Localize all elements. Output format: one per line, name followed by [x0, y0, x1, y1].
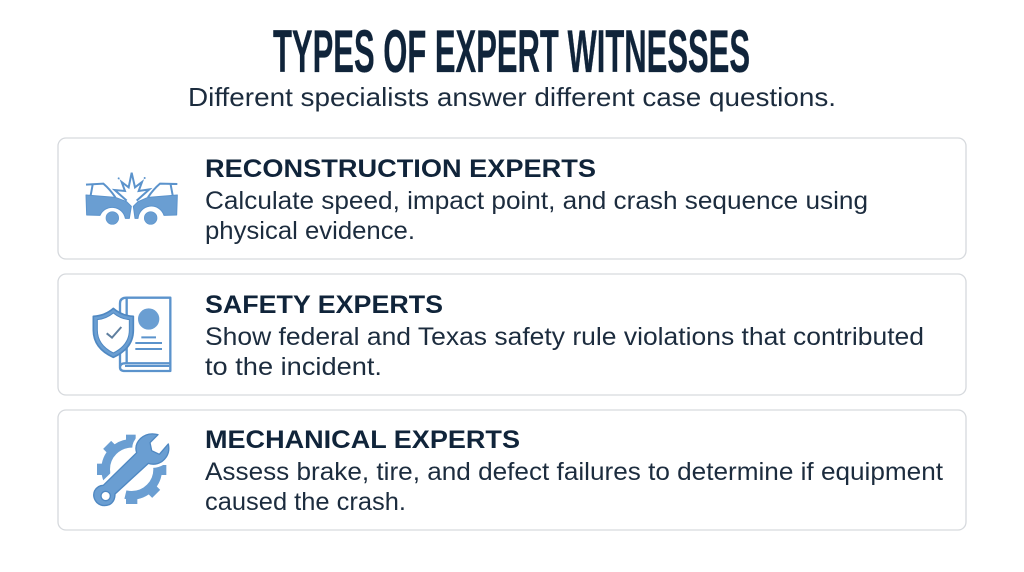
- heading: MECHANICAL EXPERTS: [205, 426, 520, 454]
- panel: reconstruction experts: [58, 138, 966, 259]
- icon: car crash: [86, 173, 177, 224]
- icon: gear and wrench: [94, 434, 169, 506]
- icon: shield and book: [93, 298, 170, 371]
- panel: mechanical experts: [58, 410, 966, 530]
- description: [205, 458, 943, 516]
- description: [205, 187, 868, 245]
- description: Show federal and Texas safety rule violations that contributed: [205, 323, 924, 351]
- description: to the incident.: [205, 353, 382, 381]
- description: Calculate speed, impact point, and crash sequence using: [205, 187, 868, 215]
- description: caused the crash.: [205, 488, 406, 516]
- heading: RECONSTRUCTION EXPERTS: [205, 155, 596, 183]
- panel: safety experts: [58, 274, 966, 395]
- heading: SAFETY EXPERTS: [205, 291, 443, 319]
- description: [205, 323, 924, 381]
- description: Assess brake, tire, and defect failures to determine if equipment: [205, 458, 943, 486]
- subtitle: Different specialists answer different case questions.: [188, 82, 836, 112]
- description: physical evidence.: [205, 217, 415, 245]
